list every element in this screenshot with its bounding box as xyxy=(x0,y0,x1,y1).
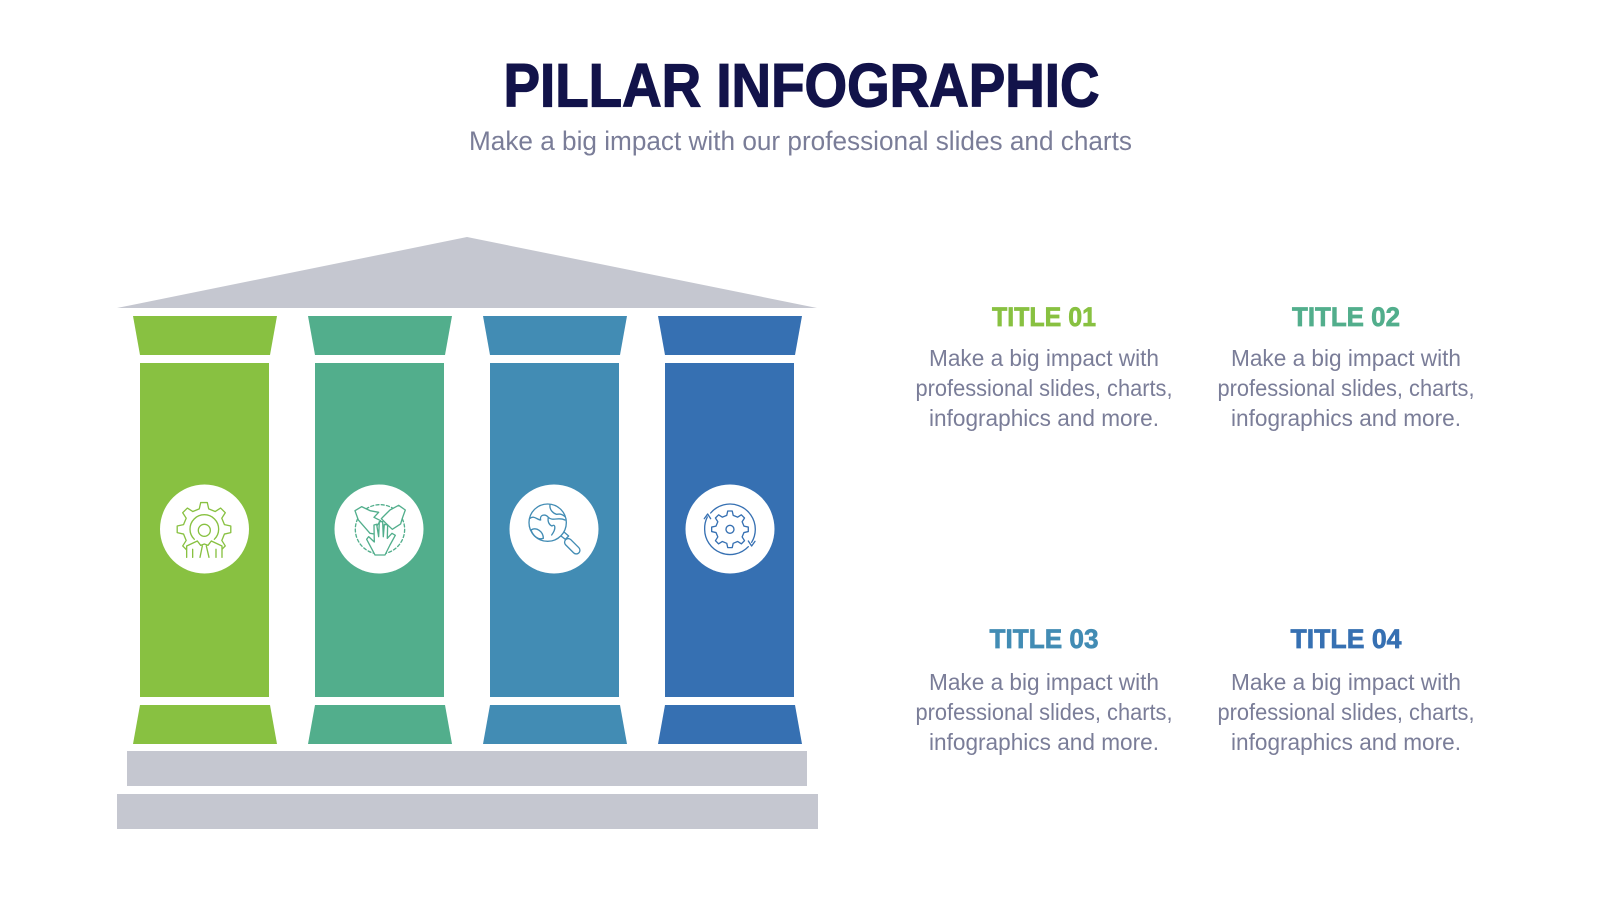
icon: gear with rotating arrows xyxy=(686,484,774,574)
text block: title 02: Make a big impact with xyxy=(1231,345,1461,371)
temple diagram xyxy=(117,237,818,829)
text block: title 01 xyxy=(916,302,1172,431)
text block: title 03: TITLE 03 xyxy=(990,624,1098,654)
upper step xyxy=(127,751,807,786)
text block: title 01: Make a big impact with xyxy=(929,345,1159,371)
text block: title 04: Make a big impact with xyxy=(1231,669,1461,695)
text block: title 04: infographics and more. xyxy=(1231,729,1461,755)
text block: title 02: TITLE 02 xyxy=(1292,302,1400,332)
text block: title 01: TITLE 01 xyxy=(992,302,1096,332)
pillar 4 xyxy=(658,316,802,744)
subtitle: Make a big impact with our professional slides and charts xyxy=(469,126,1132,156)
text block: title 01: infographics and more. xyxy=(929,405,1159,431)
text block: title 04 xyxy=(1218,624,1474,755)
lower step xyxy=(117,794,818,829)
text block: title 03 xyxy=(916,624,1172,755)
text block: title 03: Make a big impact with xyxy=(929,669,1159,695)
icon: joined hands xyxy=(334,484,424,574)
icon: gear and person xyxy=(160,484,249,574)
text block: title 02: professional slides, charts, xyxy=(1218,375,1474,401)
text block: title 02: infographics and more. xyxy=(1231,405,1461,431)
title: PILLAR INFOGRAPHIC xyxy=(504,52,1100,120)
text block: title 01: professional slides, charts, xyxy=(916,375,1172,401)
text block: title 02 xyxy=(1218,302,1474,431)
icon: globe under magnifier xyxy=(510,484,598,574)
roof xyxy=(117,237,817,308)
text block: title 03: infographics and more. xyxy=(929,729,1159,755)
pillar 1 xyxy=(133,316,277,744)
pillar 3 xyxy=(483,316,627,744)
text block: title 03: professional slides, charts, xyxy=(916,699,1172,725)
pillar 2 xyxy=(308,316,452,744)
text block: title 04: TITLE 04 xyxy=(1290,624,1402,654)
text block: title 04: professional slides, charts, xyxy=(1218,699,1474,725)
